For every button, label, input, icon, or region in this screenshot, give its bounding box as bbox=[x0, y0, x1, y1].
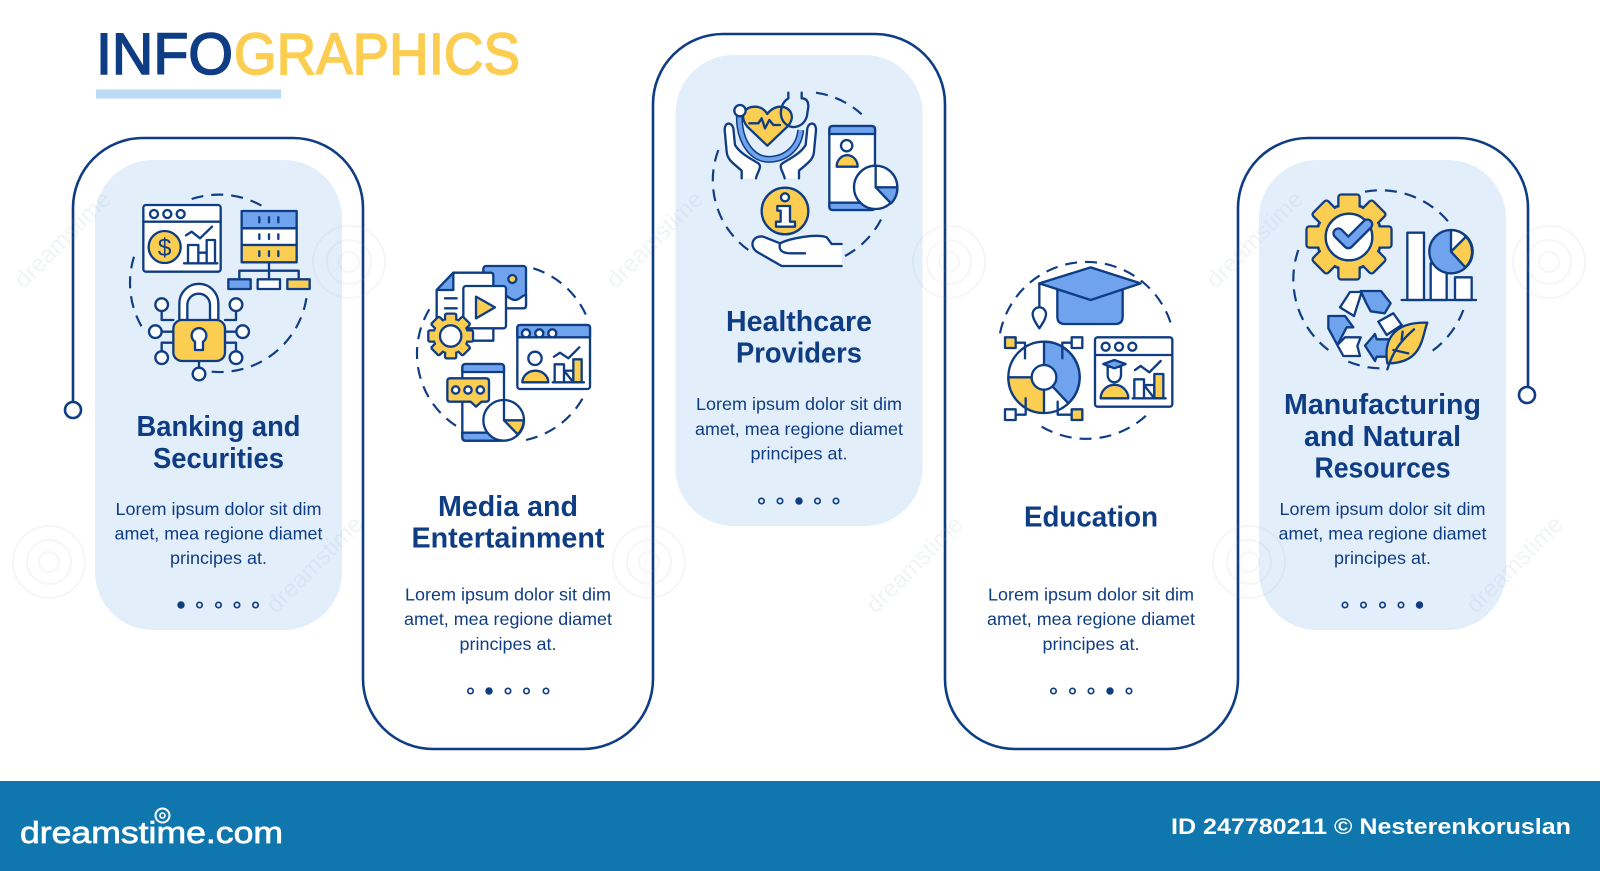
title: GRAPHICS bbox=[234, 22, 520, 87]
footer credit: ID 247780211 © Nesterenkoruslan bbox=[1171, 814, 1571, 839]
heading: Education bbox=[1024, 502, 1158, 534]
text block: principes at. bbox=[750, 444, 848, 464]
pagination dots bbox=[759, 498, 839, 504]
panel: Banking and Securities bbox=[95, 160, 342, 630]
text block: amet, mea regione diamet bbox=[1278, 524, 1487, 544]
text block: amet, mea regione diamet bbox=[114, 524, 323, 544]
text block: Lorem ipsum dolor sit dim bbox=[696, 394, 902, 414]
title bbox=[96, 22, 520, 87]
text: dreamstime bbox=[861, 511, 969, 619]
pagination dots bbox=[1051, 688, 1132, 694]
title underline bbox=[96, 90, 281, 98]
text block: amet, mea regione diamet bbox=[987, 609, 1195, 629]
icon: healthcare hands, phone and info bbox=[713, 93, 897, 266]
text block: amet, mea regione diamet bbox=[404, 609, 612, 629]
text: dreamstime bbox=[601, 186, 709, 294]
heading: and Natural bbox=[1304, 421, 1461, 453]
text: dreamstime bbox=[261, 511, 369, 619]
heading bbox=[412, 491, 605, 554]
heading: Manufacturing bbox=[1284, 389, 1481, 421]
panel: Media and Entertainment bbox=[404, 266, 612, 694]
heading: Banking and bbox=[136, 411, 300, 443]
text: dreamstime bbox=[1201, 186, 1309, 294]
text block bbox=[1278, 499, 1487, 568]
panel: Manufacturing and Natural Resources bbox=[1259, 160, 1506, 630]
text block: Lorem ipsum dolor sit dim bbox=[405, 584, 611, 604]
text block: Lorem ipsum dolor sit dim bbox=[988, 584, 1194, 604]
text block: principes at. bbox=[460, 634, 556, 654]
text block bbox=[987, 584, 1195, 654]
footer logo: dreamstime.com bbox=[20, 815, 283, 850]
pagination dots bbox=[468, 688, 549, 694]
heading bbox=[726, 306, 872, 370]
text block: principes at. bbox=[170, 548, 267, 568]
icon: banking, server and lock bbox=[130, 195, 310, 380]
outline end node bbox=[1519, 387, 1535, 403]
icon: media, gear and phone bbox=[417, 266, 590, 441]
icon: gear, charts and recycling leaf bbox=[1293, 190, 1476, 369]
text: dreamstime bbox=[9, 186, 117, 294]
pagination dots bbox=[1342, 602, 1422, 608]
heading: Securities bbox=[153, 443, 284, 475]
text block: principes at. bbox=[1042, 634, 1140, 654]
text block bbox=[114, 499, 323, 568]
heading bbox=[136, 411, 300, 475]
icon: banking, server and lock: $ bbox=[158, 235, 172, 262]
panel: Education bbox=[987, 262, 1195, 694]
heading: Providers bbox=[736, 338, 862, 370]
title: INFO bbox=[96, 22, 233, 87]
footer banner bbox=[0, 781, 1600, 871]
panel: Healthcare Providers bbox=[676, 55, 922, 526]
heading bbox=[1284, 389, 1481, 484]
text block: principes at. bbox=[1334, 548, 1431, 568]
icon: graduation cap, donut chart and dashboard bbox=[1000, 262, 1173, 439]
panel: connecting outline bbox=[73, 34, 1528, 749]
text block bbox=[404, 584, 612, 654]
text block: amet, mea regione diamet bbox=[695, 419, 903, 439]
heading: Resources bbox=[1314, 452, 1450, 484]
text block: Lorem ipsum dolor sit dim bbox=[1280, 499, 1486, 519]
heading: Media and bbox=[438, 491, 578, 523]
heading: Entertainment bbox=[412, 522, 605, 554]
text: dreamstime bbox=[1461, 511, 1569, 619]
pagination dots bbox=[178, 602, 258, 608]
heading: Healthcare bbox=[726, 306, 872, 338]
text block bbox=[695, 394, 903, 464]
outline start node bbox=[65, 402, 81, 418]
text block: Lorem ipsum dolor sit dim bbox=[116, 499, 322, 519]
